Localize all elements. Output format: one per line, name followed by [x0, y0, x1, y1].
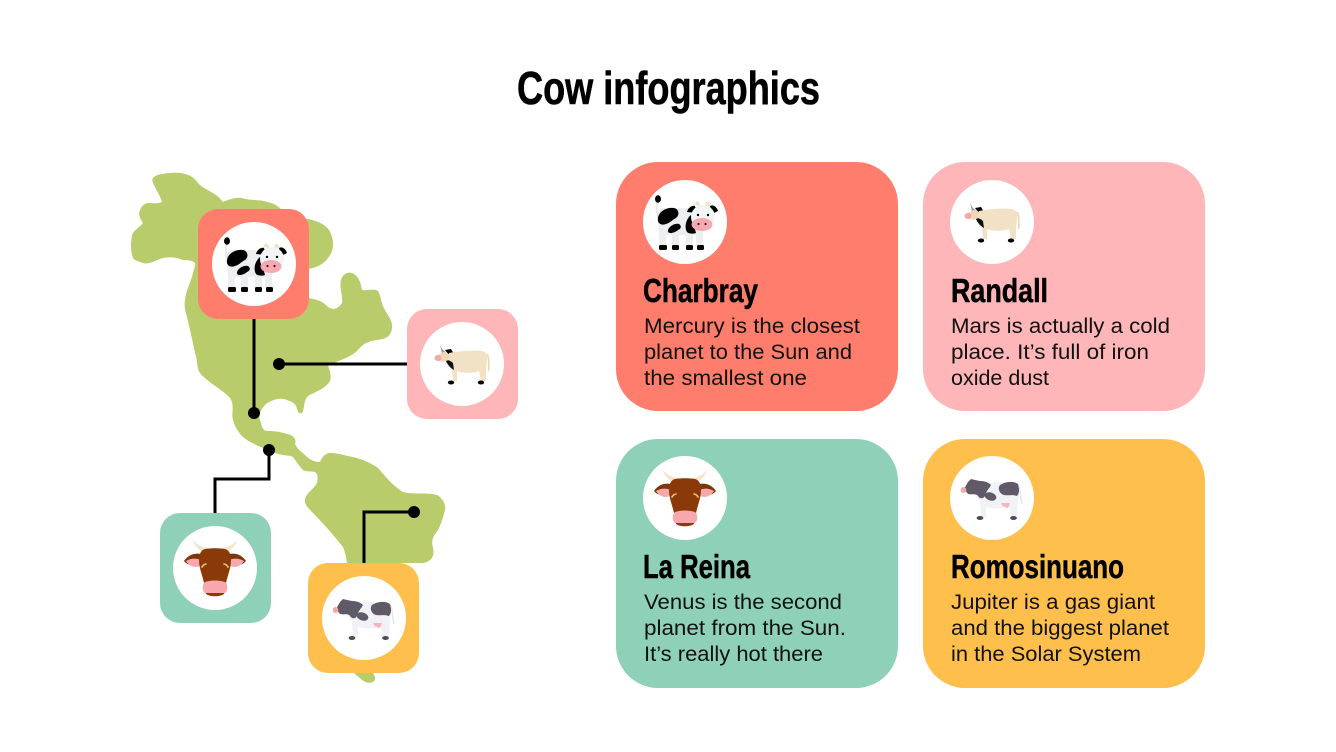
heading: Romosinuano: Romosinuano [951, 548, 1124, 585]
connector: yellow box to map point [364, 506, 420, 563]
text: La Reina description: Venus is the second [644, 590, 842, 614]
panel: Charbray [616, 162, 898, 411]
text: Romosinuano description: in the Solar System [951, 642, 1141, 666]
heading: La Reina: La Reina [643, 548, 751, 585]
heading: Randall: Randall [951, 272, 1048, 309]
text: Randall description: oxide dust [951, 366, 1049, 390]
text: Charbray description: the smallest one [644, 366, 807, 390]
connector: pink box to map point [273, 358, 407, 370]
text: Romosinuano description: and the biggest planet [951, 616, 1169, 640]
heading: Charbray: Charbray [643, 272, 759, 309]
text: La Reina description: planet from the Sun. [644, 616, 846, 640]
icon: La Reina cow [643, 456, 727, 540]
marker: Randall [407, 309, 518, 419]
text: Charbray description: Mercury is the closest [644, 314, 860, 338]
marker: Charbray [198, 209, 309, 319]
text: Randall description: Mars is actually a cold [951, 314, 1170, 338]
panel: La Reina [616, 439, 898, 688]
title: Cow infographics [517, 62, 820, 114]
text: Romosinuano description: Jupiter is a gas giant [951, 590, 1155, 614]
icon: Romosinuano cow [950, 456, 1034, 540]
connector: red box to map point [248, 319, 260, 419]
marker: Romosinuano [308, 563, 419, 673]
marker: La Reina [160, 513, 271, 623]
connector: teal box to map point [215, 444, 275, 513]
text: Charbray description: planet to the Sun and [644, 340, 852, 364]
text: La Reina description: It’s really hot there [644, 642, 823, 666]
map: North and South America [131, 173, 445, 683]
icon: Randall cow [950, 180, 1034, 264]
map panel: the Americas with markers [131, 173, 518, 683]
icon: Charbray cow [643, 180, 727, 264]
text: Randall description: place. It’s full of iron [951, 340, 1149, 364]
panel: Romosinuano [923, 439, 1205, 688]
panel: Randall [923, 162, 1205, 411]
